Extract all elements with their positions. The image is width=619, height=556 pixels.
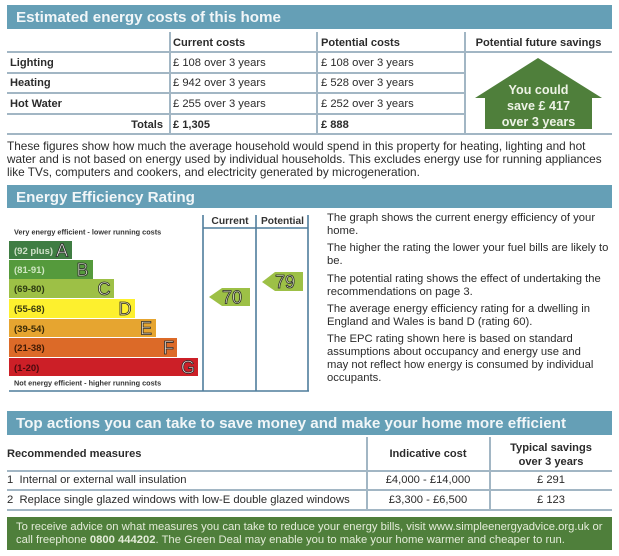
explanatory paragraph: These figures show how much the average household would spend in this property for heating, lighting and hot bbox=[7, 139, 585, 153]
note: potential rating: recommendations on page 3. bbox=[327, 286, 473, 298]
advice text bbox=[16, 521, 603, 546]
band E: E bbox=[140, 318, 152, 338]
hot water potential cost: £ 252 over 3 years bbox=[321, 98, 414, 110]
top caption: Very energy efficient - lower running costs bbox=[14, 228, 161, 236]
advice text: To receive advice on what measures you can take to reduce your energy bills, visit www.simpleenergyadvice.org.uk or bbox=[16, 521, 603, 533]
heating current cost: £ 942 over 3 years bbox=[173, 77, 266, 89]
heading: estimated energy costs: Estimated energy costs of this home bbox=[16, 9, 281, 26]
band B: (81-91) bbox=[14, 265, 45, 276]
note: EPC basis: may not reflect how energy is consumed by individual bbox=[327, 359, 593, 371]
row label: totals: Totals bbox=[131, 119, 163, 131]
explanatory paragraph bbox=[7, 139, 602, 179]
hot water current cost: £ 255 over 3 years bbox=[173, 98, 266, 110]
lighting potential cost: £ 108 over 3 years bbox=[321, 57, 414, 69]
band D: D bbox=[118, 299, 132, 319]
band C: C bbox=[98, 279, 110, 299]
advice text: call freephone 0800 444202. The Green Deal may enable you to make your home warmer and cheaper to run. bbox=[16, 534, 565, 546]
note: graph: The graph shows the current energy efficiency of your bbox=[327, 212, 595, 224]
explanatory paragraph: like TVs, computers and cookers, and electricity generated by microgeneration. bbox=[7, 165, 420, 179]
band A bbox=[9, 240, 72, 260]
column header: potential: Potential bbox=[261, 216, 304, 227]
heading: top actions bbox=[7, 411, 612, 435]
heading: top actions: Top actions you can take to save money and make your home more efficient bbox=[16, 415, 566, 432]
row label: heating: Heating bbox=[10, 77, 51, 89]
band C: (69-80) bbox=[14, 284, 45, 295]
note: graph bbox=[327, 212, 595, 237]
measure 2: 2 Replace single glazed windows with low-E double glazed windows bbox=[7, 494, 350, 506]
note: average rating bbox=[327, 303, 590, 328]
savings callout text: You could bbox=[509, 83, 568, 97]
note: EPC basis: The EPC rating shown here is based on standard bbox=[327, 333, 573, 345]
section: energy efficiency rating bbox=[7, 185, 612, 392]
rating explanation text bbox=[327, 212, 608, 384]
measure 1 saving: £ 291 bbox=[537, 474, 565, 486]
heading: energy efficiency rating: Energy Efficiency Rating bbox=[16, 189, 195, 206]
band C bbox=[9, 279, 114, 299]
measure 1: 1 Internal or external wall insulation bbox=[7, 474, 186, 486]
note: EPC basis: assumptions about occupancy and energy use and bbox=[327, 346, 581, 358]
savings callout text bbox=[502, 83, 575, 129]
section: top actions bbox=[7, 411, 612, 550]
column header: recommended measures: Recommended measures bbox=[7, 448, 141, 460]
section: estimated energy costs bbox=[7, 5, 612, 179]
column header: indicative cost: Indicative cost bbox=[389, 448, 467, 460]
total current cost: £ 1,305 bbox=[173, 119, 210, 131]
arrow: current rating 70: 70 bbox=[222, 288, 242, 308]
band B bbox=[9, 260, 93, 280]
band E bbox=[9, 318, 156, 338]
measure 2 cost: £3,300 - £6,500 bbox=[389, 494, 467, 506]
note: average rating: The average energy efficiency rating for a dwelling in bbox=[327, 303, 590, 315]
note: higher rating: be. bbox=[327, 255, 343, 267]
savings callout text: over 3 years bbox=[502, 115, 575, 129]
note: average rating: England and Wales is band D (rating 60). bbox=[327, 316, 532, 328]
column header: typical savings bbox=[510, 442, 592, 468]
arrow: potential rating 79: 79 bbox=[275, 272, 295, 292]
column header: current: Current bbox=[211, 216, 249, 227]
explanatory paragraph: water and is not based on energy used by individual households. This excludes energy use for running appliances bbox=[7, 152, 602, 166]
row label: lighting: Lighting bbox=[10, 57, 54, 69]
column header: typical savings: Typical savings bbox=[510, 442, 592, 454]
band F bbox=[9, 338, 177, 358]
column header: current costs: Current costs bbox=[173, 37, 245, 49]
heading: estimated energy costs bbox=[7, 5, 612, 29]
bottom caption: Not energy efficient - higher running costs bbox=[14, 378, 161, 388]
note: EPC basis bbox=[327, 333, 593, 384]
arrow: current rating 70 bbox=[209, 288, 250, 308]
band E: (39-54) bbox=[14, 324, 45, 335]
row label: hot water: Hot Water bbox=[10, 98, 62, 110]
note: EPC basis: occupants. bbox=[327, 372, 381, 384]
band A: (92 plus) bbox=[14, 246, 53, 257]
measure 1 cost: £4,000 - £14,000 bbox=[386, 474, 470, 486]
band G bbox=[9, 358, 198, 378]
note: graph: home. bbox=[327, 225, 358, 237]
green advice banner bbox=[7, 517, 612, 550]
note: potential rating bbox=[327, 273, 601, 298]
note: higher rating bbox=[327, 242, 608, 267]
lighting current cost: £ 108 over 3 years bbox=[173, 57, 266, 69]
band B: B bbox=[76, 260, 89, 280]
heating potential cost: £ 528 over 3 years bbox=[321, 77, 414, 89]
note: potential rating: The potential rating shows the effect of undertaking the bbox=[327, 273, 601, 285]
band F: (21-38) bbox=[14, 343, 45, 354]
total potential cost: £ 888 bbox=[321, 119, 349, 131]
band D bbox=[9, 299, 135, 319]
note: higher rating: The higher the rating the lower your fuel bills are likely to bbox=[327, 242, 608, 254]
band G: G bbox=[181, 358, 195, 378]
measure 2 saving: £ 123 bbox=[537, 494, 565, 506]
savings callout text: save £ 417 bbox=[507, 99, 570, 113]
arrow: potential rating 79 bbox=[262, 272, 303, 292]
icon: green savings house bbox=[475, 58, 602, 129]
column header: potential future savings: Potential future savings bbox=[476, 37, 601, 49]
band A: A bbox=[56, 240, 68, 260]
band F: F bbox=[163, 338, 174, 358]
band G: (1-20) bbox=[14, 363, 39, 374]
column header: typical savings: over 3 years bbox=[519, 456, 583, 468]
band D: (55-68) bbox=[14, 304, 45, 315]
chart: EPC rating bands bbox=[9, 215, 309, 392]
column header: potential costs: Potential costs bbox=[321, 37, 400, 49]
heading: energy efficiency rating bbox=[7, 185, 612, 208]
